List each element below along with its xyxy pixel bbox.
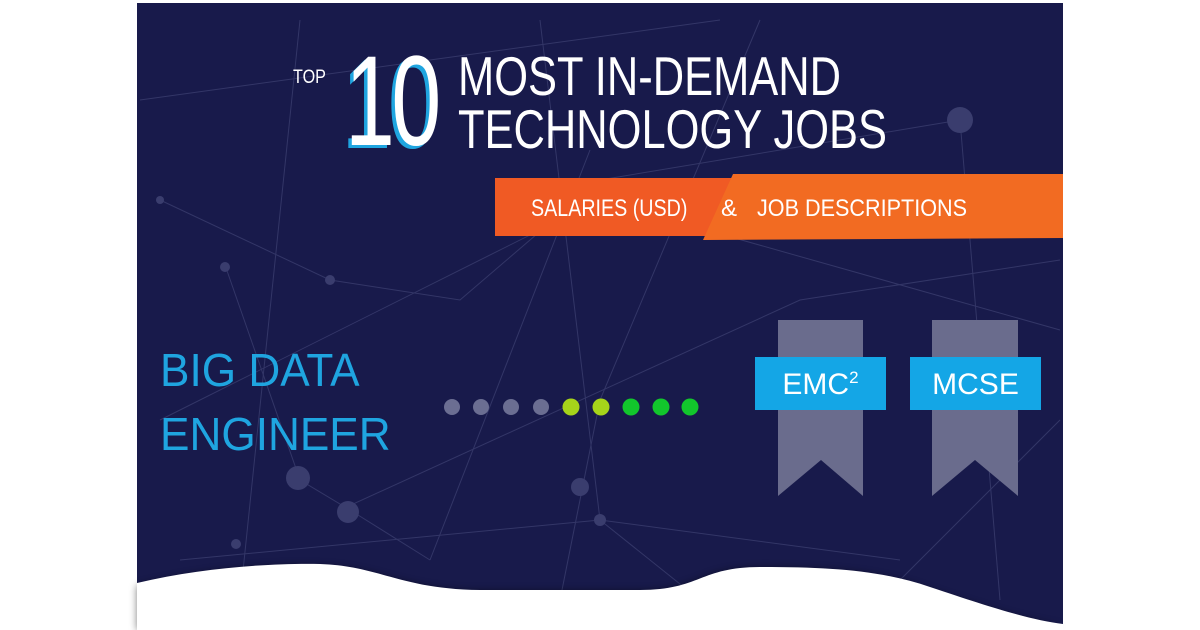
orange banner xyxy=(495,174,1063,240)
job title xyxy=(160,344,391,460)
ribbon: EMC2: EMC2 xyxy=(782,368,859,401)
job title: ENGINEER xyxy=(160,408,391,460)
job title: BIG DATA xyxy=(160,344,360,396)
ribbon: MCSE: MCSE xyxy=(932,368,1019,401)
title: TECHNOLOGY JOBS xyxy=(458,98,887,160)
orange banner: SALARIES (USD) xyxy=(531,195,687,222)
ribbon: EMC2 xyxy=(755,320,886,496)
title: MOST IN-DEMAND xyxy=(458,45,841,107)
orange banner: JOB DESCRIPTIONS xyxy=(757,195,967,222)
orange banner: & xyxy=(721,195,737,222)
title: 10 xyxy=(345,30,438,173)
rating dots xyxy=(444,398,698,416)
ribbon: MCSE xyxy=(910,320,1041,496)
title xyxy=(293,30,887,173)
title: TOP xyxy=(293,67,326,88)
